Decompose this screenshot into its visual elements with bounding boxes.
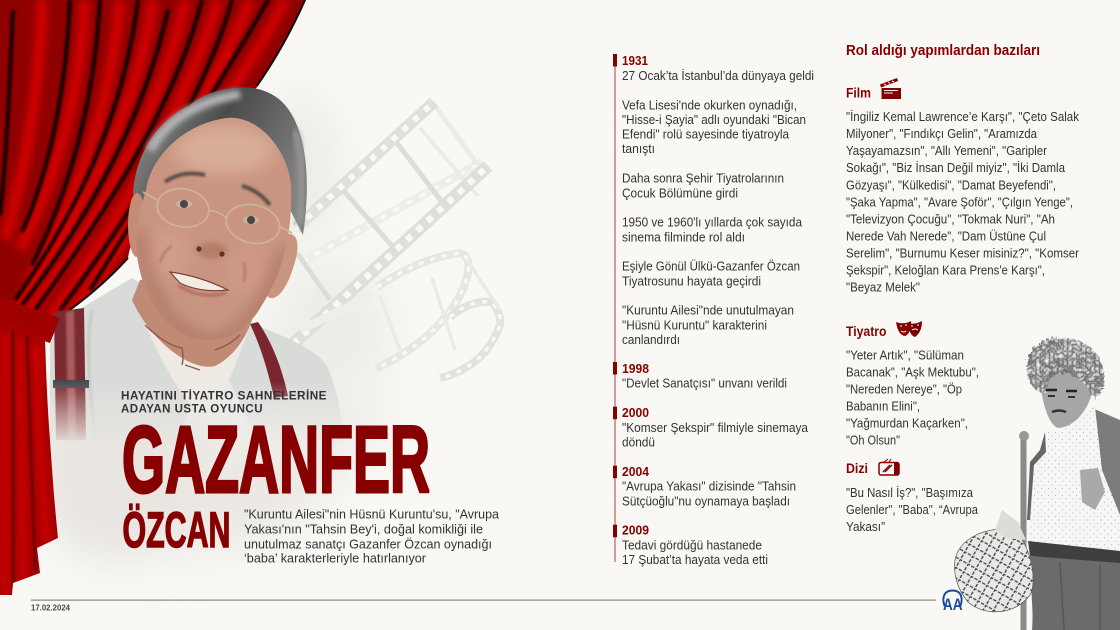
- figure: actor in costume with cane and bundle: [955, 337, 1120, 630]
- timeline: 1931: "Hüsnü Kuruntu" karakterini: [622, 317, 767, 332]
- belt: [1028, 541, 1120, 563]
- watercolor wash: [40, 90, 390, 560]
- icon: clapperboard: [880, 78, 901, 99]
- date: 17.02.2024: [31, 604, 71, 613]
- timeline: 2009: [622, 523, 768, 567]
- timeline: 2004: [622, 464, 796, 508]
- series heading: Dizi: [846, 460, 868, 476]
- theatre heading: Tiyatro: [846, 323, 886, 339]
- title: surname: ÖZCAN: [122, 502, 230, 558]
- timeline: 2000: "Komser Şekspir" filmiyle sinemaya: [622, 420, 809, 435]
- timeline axis: [613, 54, 617, 562]
- timeline: 1931: tanıştı: [622, 141, 655, 156]
- theatre list: "Oh Olsun": [846, 433, 900, 448]
- film list: Yaşayamazsın", "Allı Yemeni", "Garipler: [846, 143, 1048, 158]
- film strip: upper: [293, 102, 488, 344]
- timeline: 1998: 1998: [622, 361, 649, 376]
- film list: "Televizyon Çocuğu", "Tokmak Nuri", "Ah: [846, 211, 1055, 226]
- timeline: 1931: sinema filminde rol aldı: [622, 229, 745, 244]
- timeline: 1998: [622, 361, 787, 391]
- eyebrows: [165, 174, 270, 205]
- timeline: 1931: Tiyatrosunu hayata geçirdi: [622, 273, 761, 288]
- timeline: 1931: 1950 ve 1960'lı yıllarda çok sayıda: [622, 215, 803, 230]
- film list: Serelim", "Burnumu Keser misiniz?", "Komser: [846, 246, 1080, 261]
- theatre list: "Nereden Nereye", "Öp: [846, 381, 962, 396]
- subtitle: ADAYAN USTA OYUNCU: [121, 401, 263, 415]
- hand: [1080, 468, 1105, 510]
- timeline: 2000: 2000: [622, 405, 649, 420]
- film list: Milyoner", "Fındıkçı Gelin", "Aramızda: [846, 126, 1038, 141]
- film list: Şekspir", Keloğlan Kara Prens'e Karşı",: [846, 263, 1045, 278]
- ear left: [128, 193, 146, 257]
- timeline: 2009: 2009: [622, 523, 649, 538]
- theatre list: "Yeter Artık", "Sülüman: [846, 347, 964, 362]
- timeline: 1931: canlandırdı: [622, 332, 680, 347]
- cane: [1020, 434, 1026, 630]
- ear right: [266, 234, 297, 298]
- intro paragraph: Yakası'nın "Tahsin Bey'i, doğal komikliği ile: [244, 521, 483, 536]
- footer rule: [31, 600, 936, 601]
- bundle: [955, 529, 1033, 612]
- subtitle: HAYATINI TİYATRO SAHNELERİNE: [121, 387, 327, 402]
- timeline: 1931: [622, 53, 814, 347]
- film list: Gözyaşı", "Külkedisi", "Damat Beyefendi",: [846, 177, 1056, 192]
- intro paragraph: ‘baba’ karakterleriyle hatırlanıyor: [244, 551, 427, 566]
- timeline: 1931: "Hisse-i Şayia" adlı oyundaki "Bican: [622, 112, 806, 127]
- productions heading: Rol aldığı yapımlardan bazıları: [846, 43, 1040, 59]
- timeline: 2004: Sütçüoğlu"nu oynamaya başladı: [622, 493, 790, 508]
- face: [137, 118, 292, 338]
- intro paragraph: "Kuruntu Ailesi"nin Hüsnü Kuruntu'su, "Avrupa: [244, 506, 500, 521]
- film list: [846, 109, 1080, 295]
- timeline: 2000: döndü: [622, 435, 655, 450]
- series list: [846, 485, 979, 534]
- film list: "Şaka Yapma", "Avare Şoför", "Çılgın Yenge",: [846, 194, 1073, 209]
- curly hair: [1025, 337, 1102, 398]
- logo: AA: [943, 590, 962, 614]
- theatre list: Bacanak", "Aşk Mektubu",: [846, 364, 979, 379]
- theatre list: Babanın Elini",: [846, 398, 920, 414]
- series list: "Bu Nasıl İş?", "Başımıza: [846, 485, 974, 500]
- logo: AA: AA: [943, 595, 962, 614]
- nose: [196, 242, 228, 259]
- timeline: 2004: 2004: [622, 464, 650, 479]
- film heading: Film: [846, 85, 871, 101]
- timeline: 2009: 17 Şubat’ta hayata veda etti: [622, 552, 768, 567]
- timeline: 1931: Vefa Lisesi'nde okurken oynadığı,: [622, 97, 797, 112]
- intro paragraph: [244, 506, 500, 566]
- theatre list: [846, 347, 979, 448]
- icon: theatre masks: [896, 321, 922, 337]
- icon: television: [879, 459, 899, 475]
- theatre list: "Yağmurdan Kaçarken",: [846, 416, 968, 431]
- curtain: tie and lower drape: [0, 298, 60, 595]
- timeline: 1998: "Devlet Sanatçısı" unvanı verildi: [622, 376, 787, 391]
- timeline: 2000: [622, 405, 809, 450]
- neck: [132, 270, 256, 367]
- intro paragraph: unutulmaz sanatçı Gazanfer Özcan oynadığı: [244, 536, 492, 551]
- timeline: 1931: 1931: [622, 53, 648, 68]
- curtain: upper red drape: [0, 0, 310, 325]
- timeline: 1931: Efendi" rolü sayesinde tiyatroyla: [622, 127, 790, 142]
- film list: "İngiliz Kemal Lawrence’e Karşı", "Çeto Salak: [846, 109, 1080, 124]
- shirt and shoulders: [50, 278, 345, 450]
- pants: [1030, 556, 1120, 630]
- film list: Sokağı", "Biz İnsan Değil miyiz", "İki Damla: [846, 160, 1066, 175]
- neck and face: [1040, 368, 1092, 428]
- mouth: [170, 272, 228, 291]
- glasses: [143, 185, 292, 248]
- film list: Nerede Vah Nerede", "Dam Üstüne Çul: [846, 228, 1046, 244]
- film strip: lower: [300, 253, 500, 378]
- shirt: [1028, 407, 1120, 552]
- portrait: actor in shirt and suspenders: [50, 87, 345, 450]
- timeline: 1931: Eşiyle Gönül Ülkü-Gazanfer Özcan: [622, 259, 800, 274]
- film list: "Beyaz Melek": [846, 280, 920, 295]
- timeline: 1931: Çocuk Bölümüne girdi: [622, 185, 738, 200]
- series list: Gelenler", "Baba", “Avrupa: [846, 502, 979, 517]
- timeline: 1931: 27 Ocak’ta İstanbul’da dünyaya geldi: [622, 68, 814, 83]
- subtitle: [121, 387, 327, 415]
- timeline: 2004: "Avrupa Yakası" dizisinde "Tahsin: [622, 479, 796, 494]
- timeline: 2009: Tedavi gördüğü hastanede: [622, 537, 762, 552]
- jacket: [1088, 408, 1120, 515]
- eyes: [176, 200, 259, 224]
- lapel strap: [1027, 432, 1046, 520]
- title: first name: GAZANFER: [122, 407, 430, 513]
- timeline: 1931: Daha sonra Şehir Tiyatrolarının: [622, 171, 784, 186]
- series list: Yakası”: [846, 519, 885, 534]
- timeline: 1931: "Kuruntu Ailesi"nde unutulmayan: [622, 303, 794, 318]
- hair: [133, 87, 307, 235]
